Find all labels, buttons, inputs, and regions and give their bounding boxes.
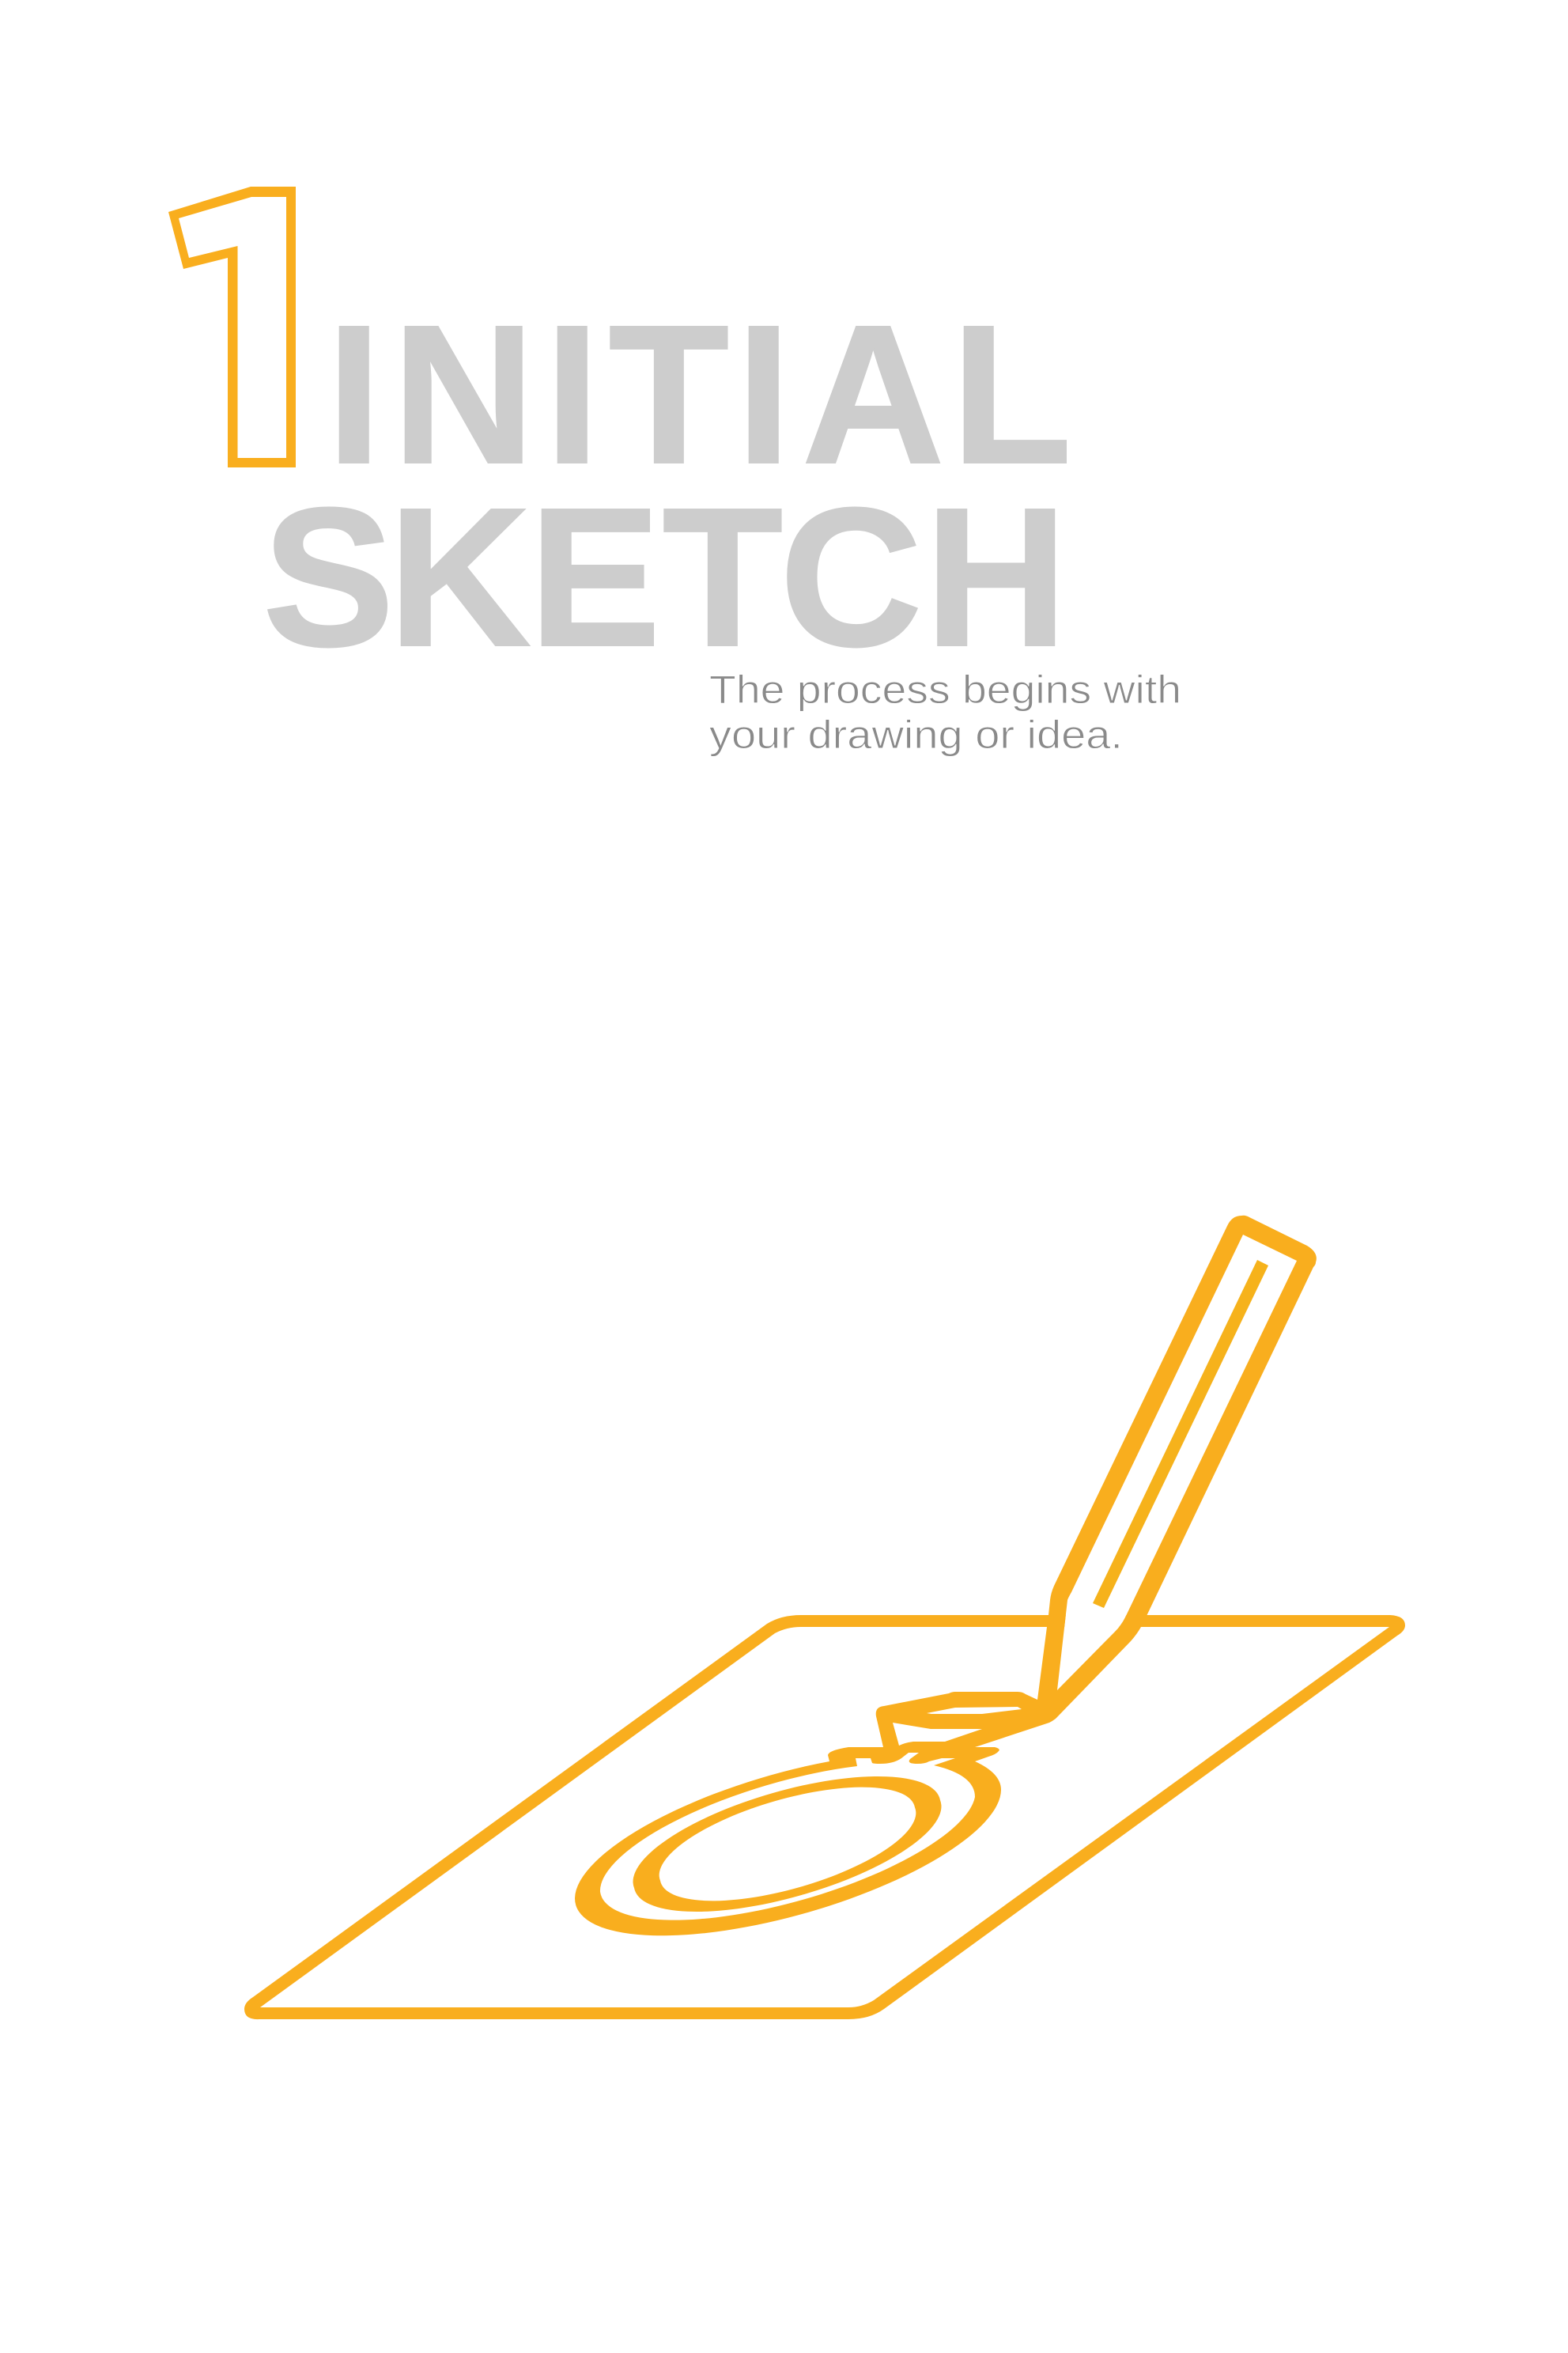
subtitle line 1: The process begins with [709,668,1181,712]
inner sketched ring [633,1776,941,1912]
heading: INITIAL SKETCH [263,284,1072,687]
pencil with scribble and outer sketched ring [575,1216,1317,1935]
heading line 1: INITIAL [327,284,1072,505]
heading line 2: SKETCH [263,467,1067,687]
step number 1 outline [168,187,296,467]
pencil interior mask [1057,1235,1297,1690]
pencil centre line [1093,1260,1268,1608]
subtitle text [709,668,1181,757]
subtitle line 2: your drawing or idea. [709,713,1123,757]
illustration: pencil sketching on paper [244,1216,1405,2019]
paper sheet outline [244,1615,1405,2019]
